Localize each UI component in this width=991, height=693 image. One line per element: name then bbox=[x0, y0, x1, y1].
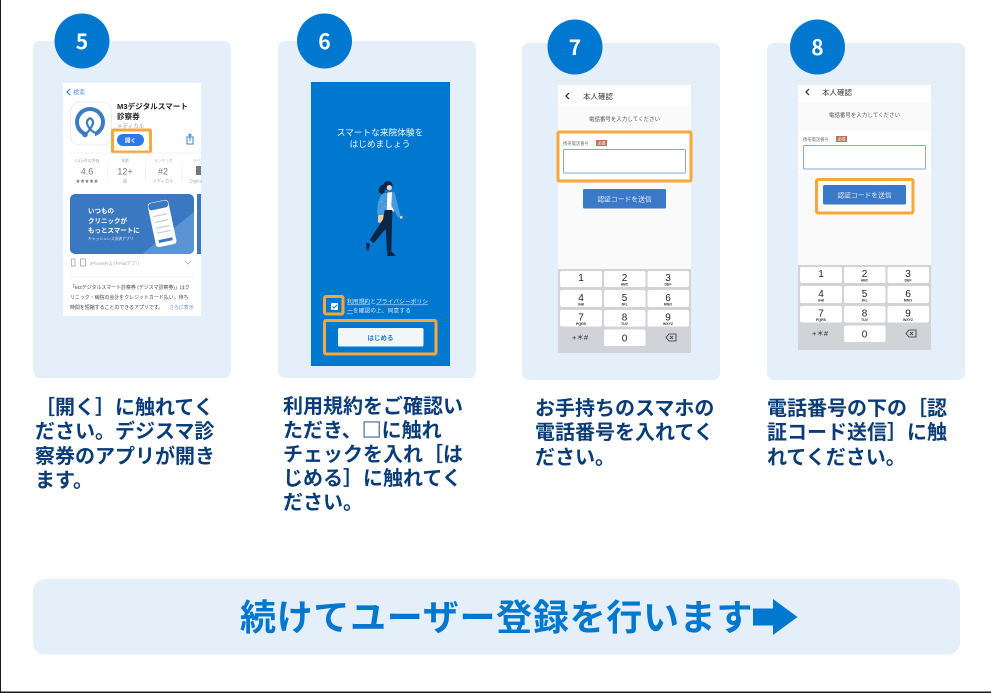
stats row: 2.8万件の評価 bbox=[75, 158, 99, 163]
caption: step 8: 証コード送信］に触 bbox=[767, 416, 947, 445]
highlight: start button bbox=[324, 320, 436, 354]
numeric keypad: WXYZ bbox=[663, 322, 674, 326]
agreement text bbox=[347, 298, 428, 314]
stats row bbox=[75, 158, 203, 184]
numeric keypad: +＊# bbox=[812, 329, 829, 338]
stats row: 年齢 bbox=[121, 158, 129, 163]
stats row: 4.6 bbox=[81, 166, 93, 176]
caption: step 7 bbox=[535, 392, 714, 470]
button: send code bbox=[823, 185, 906, 204]
caption: step 7: ださい。 bbox=[535, 441, 615, 470]
phone number form bbox=[798, 131, 931, 174]
screenshot: app store page: 検索 bbox=[73, 88, 85, 96]
numeric keypad: WXYZ bbox=[903, 318, 914, 322]
numeric keypad bbox=[558, 269, 691, 353]
phone number form: 必須 bbox=[598, 141, 605, 146]
caption: step 6: ださい。 bbox=[283, 486, 363, 515]
button: start bbox=[338, 328, 424, 346]
app description: 「M3デジタルスマート診察券 (デジスマ診察券)」はク bbox=[70, 284, 190, 291]
banner text: 続けてユーザー登録を行います bbox=[240, 589, 753, 641]
numeric keypad: 2 bbox=[862, 269, 868, 280]
caption: step 8: 電話番号の下の［認 bbox=[767, 392, 947, 421]
numeric keypad: DEF bbox=[904, 278, 912, 282]
badge: step number 8: 8 bbox=[811, 32, 824, 62]
numeric keypad: 6 bbox=[665, 293, 671, 304]
agreement text: と bbox=[370, 298, 376, 306]
caption: step 6: じめる］に触れてく bbox=[283, 462, 462, 491]
promo banner: キャッシュレス決済アプリ bbox=[88, 236, 134, 241]
panel: step 7 bbox=[522, 20, 720, 380]
button: send code bbox=[583, 189, 666, 208]
promo banner: もっとスマートに bbox=[88, 226, 140, 234]
stats row: DigiKo bbox=[190, 178, 203, 184]
numeric keypad: 7 bbox=[818, 308, 824, 320]
numeric keypad: 8 bbox=[862, 308, 868, 320]
caption: step 5 bbox=[35, 391, 215, 493]
icon: app logo bbox=[70, 102, 112, 145]
highlight: checkbox bbox=[324, 296, 343, 314]
screenshot: start screen: はじめましょう bbox=[350, 139, 410, 149]
app description: 時間を短縮することのできるアプリです。 bbox=[70, 304, 163, 311]
numeric keypad: MNO bbox=[904, 298, 912, 302]
numeric keypad: TUV bbox=[861, 318, 869, 322]
badge: step number 6: 6 bbox=[318, 26, 331, 56]
badge: step number 7: 7 bbox=[569, 32, 581, 62]
numeric keypad: 1 bbox=[818, 269, 824, 280]
badge: step number 8 bbox=[790, 20, 845, 74]
banner: continue to user registration bbox=[33, 579, 960, 654]
phone number form: 携帯電話番号 bbox=[803, 136, 829, 143]
numeric keypad: ABC bbox=[861, 278, 869, 282]
screenshot: send code: 本人確認 bbox=[822, 87, 852, 97]
illustration: walking woman bbox=[366, 181, 403, 256]
app description: さらに表示 bbox=[169, 304, 194, 311]
caption: step 7: 電話番号を入れてく bbox=[535, 416, 714, 445]
numeric keypad: 4 bbox=[578, 293, 584, 304]
numeric keypad: ABC bbox=[621, 282, 629, 286]
numeric keypad: 3 bbox=[905, 269, 911, 280]
numeric keypad: 6 bbox=[905, 289, 911, 300]
phone number form: 必須 bbox=[838, 137, 845, 142]
caption: step 8 bbox=[767, 392, 947, 470]
numeric keypad: PQRS bbox=[576, 322, 587, 326]
phone number form bbox=[558, 132, 691, 181]
numeric keypad: TUV bbox=[621, 322, 629, 326]
numeric keypad: DEF bbox=[664, 282, 672, 286]
promo banner: いつもの bbox=[88, 207, 114, 215]
numeric keypad: 3 bbox=[665, 273, 671, 284]
checkbox bbox=[331, 303, 338, 310]
caption: step 8: れてください。 bbox=[767, 441, 906, 470]
numeric keypad: 4 bbox=[818, 289, 824, 300]
numeric keypad: 5 bbox=[862, 289, 868, 300]
promo banner: クリニックが bbox=[88, 216, 128, 225]
button: start: はじめる bbox=[368, 334, 394, 342]
numeric keypad: PQRS bbox=[816, 318, 827, 322]
numeric keypad: +＊# bbox=[572, 333, 589, 342]
badge: step number 5 bbox=[54, 14, 110, 68]
button: send code: 認証コードを送信 bbox=[597, 194, 652, 204]
agreement text: プライバシーポリシ bbox=[376, 298, 428, 306]
stats row: メディカル bbox=[152, 178, 174, 184]
numeric keypad bbox=[798, 265, 931, 350]
screenshot: send code: 電話番号を入力してください bbox=[829, 111, 901, 119]
numeric keypad: JKL bbox=[861, 298, 869, 302]
agreement text: 利用規約 bbox=[347, 298, 370, 306]
app description bbox=[70, 284, 194, 311]
icon: share bbox=[187, 134, 193, 144]
screenshot: phone number entry: 本人確認 bbox=[583, 91, 613, 101]
caption: step 5: ［開く］に触れてく bbox=[35, 391, 214, 420]
highlight: open button bbox=[112, 130, 150, 152]
numeric keypad: JKL bbox=[621, 302, 629, 306]
numeric keypad: GHI bbox=[818, 298, 824, 302]
screenshot: phone number entry bbox=[558, 85, 691, 353]
numeric keypad: MNO bbox=[664, 302, 672, 306]
screenshot: start screen bbox=[311, 82, 450, 366]
panel: step 8 bbox=[767, 20, 965, 380]
button: open bbox=[117, 134, 144, 146]
stats row: 12+ bbox=[117, 166, 133, 176]
panel: step 5 bbox=[33, 14, 231, 378]
stats row: デベ bbox=[193, 158, 201, 163]
numeric keypad: 5 bbox=[622, 293, 628, 304]
caption: step 6: ただき、□に触れ bbox=[283, 414, 442, 443]
button: send code: 認証コードを送信 bbox=[837, 190, 892, 200]
device row: iPhoneおよびiPadアプリ bbox=[90, 260, 140, 267]
promo banner bbox=[70, 194, 201, 254]
numeric keypad: GHI bbox=[578, 302, 584, 306]
app description: リニック・病院の会計をクレジットカード払い。待ち bbox=[70, 294, 188, 301]
caption: step 5: 察券のアプリが開き bbox=[35, 440, 215, 469]
numeric keypad: 0 bbox=[862, 330, 868, 340]
caption: step 7: お手持ちのスマホの bbox=[535, 392, 714, 421]
numeric keypad: 7 bbox=[578, 312, 584, 324]
screenshot: app store page: M3デジタルスマート bbox=[117, 101, 188, 111]
highlight: send code button bbox=[816, 180, 913, 213]
screenshot: app store page: メディカル bbox=[117, 122, 145, 130]
badge: step number 7 bbox=[548, 20, 602, 74]
numeric keypad: 9 bbox=[665, 312, 671, 324]
caption: step 5: ます。 bbox=[35, 464, 93, 493]
screenshot: app store page bbox=[63, 83, 203, 316]
screenshot: start screen: スマートな来院体験を bbox=[337, 126, 423, 138]
panel: step 6 bbox=[278, 14, 476, 378]
screenshot: send code bbox=[798, 85, 931, 350]
caption: step 6: チェックを入れ［は bbox=[283, 438, 463, 467]
caption: step 6: 利用規約をご確認い bbox=[283, 390, 463, 419]
screenshot: phone number entry: 電話番号を入力してください bbox=[589, 115, 661, 123]
agreement text: ーを確認の上、同意する bbox=[347, 306, 411, 314]
phone number form: 携帯電話番号 bbox=[563, 140, 589, 147]
numeric keypad: 8 bbox=[622, 312, 628, 324]
caption: step 6 bbox=[283, 390, 463, 515]
stats row: #2 bbox=[158, 166, 168, 176]
badge: step number 5: 5 bbox=[76, 26, 88, 56]
numeric keypad: 0 bbox=[622, 334, 628, 344]
badge: step number 6 bbox=[297, 14, 352, 68]
button: open: 開く bbox=[125, 138, 136, 144]
phone mockup bbox=[147, 199, 177, 248]
numeric keypad: 9 bbox=[905, 308, 911, 320]
device row bbox=[72, 259, 191, 267]
highlight: phone number field bbox=[558, 132, 691, 181]
numeric keypad: 1 bbox=[578, 273, 584, 284]
stats row: ランキング bbox=[154, 158, 173, 163]
screenshot: app store page: 診察券 bbox=[117, 111, 140, 121]
numeric keypad: 2 bbox=[622, 273, 628, 284]
stats row: ★★★★★ bbox=[76, 178, 99, 184]
caption: step 5: ださい。デジスマ診 bbox=[35, 415, 214, 444]
arrow bbox=[753, 599, 798, 635]
stats row: 歳 bbox=[123, 178, 128, 184]
